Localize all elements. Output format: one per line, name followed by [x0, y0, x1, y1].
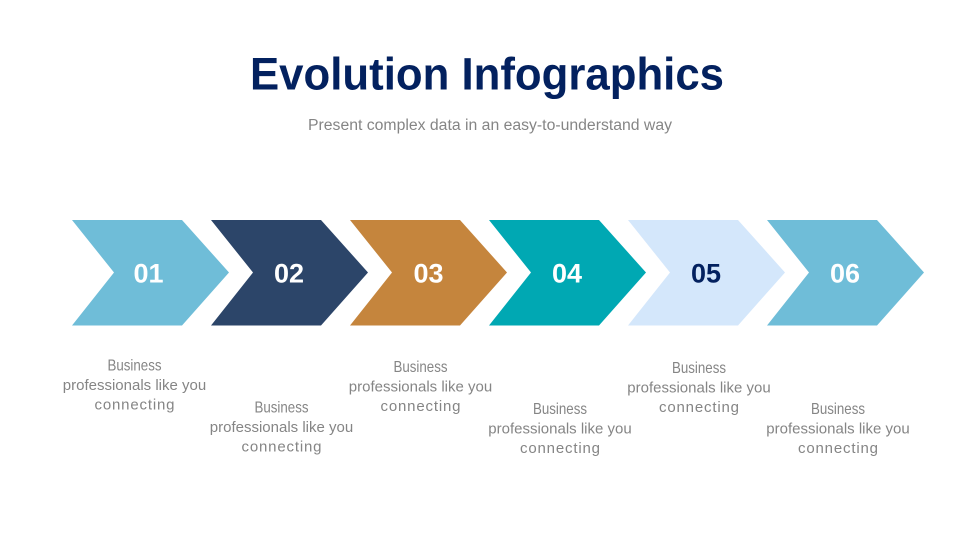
arrow 02: [211, 220, 368, 326]
arrow 01: 01: [133, 258, 164, 288]
arrow 02: 02: [274, 258, 304, 288]
arrow 05: [628, 220, 785, 326]
arrow 04: 04: [552, 258, 582, 288]
arrow 03: 03: [413, 258, 444, 288]
text block 04: professionals like you: [488, 420, 632, 438]
text block 01: [63, 358, 206, 414]
text block 06: [766, 401, 910, 457]
text block 05: connecting: [659, 399, 739, 416]
text block 06: professionals like you: [766, 420, 910, 438]
arrow 05: 05: [691, 258, 721, 288]
text block 02: connecting: [242, 438, 322, 456]
text block 03: professionals like you: [349, 378, 492, 396]
text block 01: connecting: [94, 396, 174, 414]
text block 03: Business: [394, 359, 448, 376]
text block 02: professionals like you: [210, 419, 353, 436]
text block 04: connecting: [520, 440, 600, 457]
text block 02: [210, 400, 353, 456]
arrow 03: [350, 220, 507, 326]
text block 05: professionals like you: [627, 380, 771, 396]
title: Evolution Infographics: [250, 48, 724, 100]
arrow 06: [767, 220, 924, 326]
arrow 04: [489, 220, 646, 326]
arrow 06: 06: [830, 258, 860, 288]
text block 06: Business: [811, 401, 865, 418]
text block 03: connecting: [380, 398, 460, 415]
text block 01: Business: [108, 358, 162, 374]
text block 05: [627, 360, 771, 416]
arrow 01: [72, 220, 229, 326]
text block 04: [488, 401, 632, 457]
text block 03: [349, 359, 492, 415]
text block 05: Business: [672, 360, 726, 377]
text block 01: professionals like you: [63, 377, 206, 394]
text block 06: connecting: [798, 440, 878, 457]
text block 02: Business: [254, 400, 308, 416]
text block 04: Business: [533, 401, 587, 418]
subtitle: Present complex data in an easy-to-understand way: [308, 117, 672, 134]
